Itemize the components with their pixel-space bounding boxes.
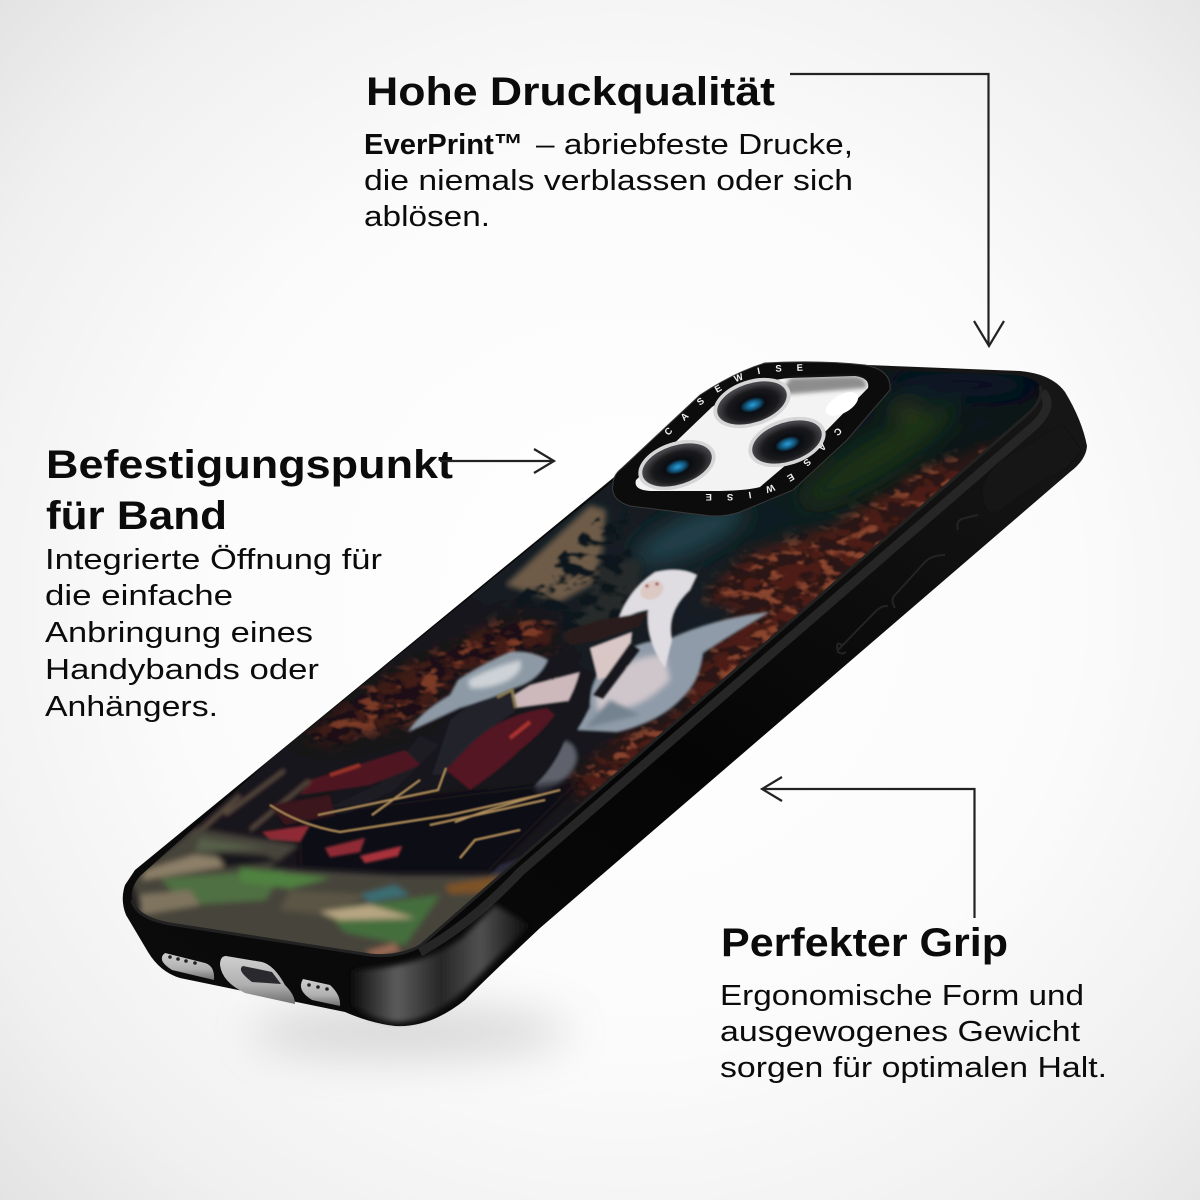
black gloves xyxy=(593,643,640,699)
bottom ports xyxy=(162,953,340,1006)
top right corner strap slot xyxy=(982,425,1080,512)
side rail highlight xyxy=(420,392,1047,952)
red eyes xyxy=(645,582,659,588)
body text xyxy=(45,544,382,723)
heading: Perfekter Grip xyxy=(721,921,1008,965)
body text: Ergonomische Form und xyxy=(720,980,1084,1012)
body text: die niemals verblassen oder sich xyxy=(364,165,853,197)
white hair and ears xyxy=(618,556,706,668)
arrow: to lanyard point xyxy=(440,449,554,473)
dark lower ground xyxy=(300,780,580,880)
brand ring text xyxy=(665,364,842,500)
corner sheen xyxy=(352,905,530,1022)
callout: Perfekter Grip xyxy=(720,921,1107,1084)
painted ground: tan and green xyxy=(130,828,505,960)
body text: – abriebfeste Drucke, xyxy=(536,129,853,161)
body text: ausgewogenes Gewicht xyxy=(720,1016,1080,1048)
lens: right xyxy=(742,408,832,476)
dark gown xyxy=(487,670,590,805)
face xyxy=(640,580,664,600)
speaker left xyxy=(162,953,214,980)
phone case xyxy=(122,361,1087,1026)
arrow: to grip side xyxy=(762,777,974,918)
arrow: to print surface xyxy=(790,74,1004,346)
body text: ablösen. xyxy=(364,201,490,233)
case body xyxy=(123,363,1087,1026)
phone drop shadow xyxy=(250,1006,570,1058)
lens: top xyxy=(707,369,797,437)
callout: Hohe Druckqualität xyxy=(364,70,853,233)
camera bump xyxy=(612,361,891,516)
body text: die einfache xyxy=(45,580,233,612)
brand ring text: CASEWISE xyxy=(706,428,842,500)
heading: für Band xyxy=(46,494,227,538)
stocking legs xyxy=(432,695,515,775)
left drape xyxy=(300,750,420,795)
gold ornaments xyxy=(270,768,560,858)
fox head and fur xyxy=(408,652,548,732)
speaker right xyxy=(301,979,340,1006)
screen rim xyxy=(132,386,1041,956)
printed artwork xyxy=(132,371,1040,954)
white fox tails xyxy=(534,612,770,795)
body text: Anbringung eines xyxy=(45,617,313,649)
figure xyxy=(300,556,706,815)
side buttons xyxy=(837,515,978,654)
red dress xyxy=(446,708,555,790)
white camera window xyxy=(636,376,868,491)
body text xyxy=(720,980,1107,1084)
red lower drapery xyxy=(261,794,519,878)
red flower bushes xyxy=(304,435,1000,808)
body text: sorgen für optimalen Halt. xyxy=(720,1052,1107,1084)
body text xyxy=(364,129,853,233)
heading: Befestigungspunkt xyxy=(46,443,453,487)
torso xyxy=(590,632,632,680)
brown streaks at left xyxy=(190,770,310,840)
brand ring text: CASEWISE xyxy=(665,364,803,435)
window inner shading xyxy=(780,376,866,395)
body text: Integrierte Öffnung für xyxy=(45,544,382,576)
heading xyxy=(46,443,453,538)
sleeve arm xyxy=(565,612,648,645)
body text: Handybands oder xyxy=(45,654,319,686)
heading: Hohe Druckqualität xyxy=(366,70,775,114)
green sky haze xyxy=(628,373,1030,577)
gold thigh band xyxy=(497,690,516,708)
tree with moonlit clouds xyxy=(504,501,646,636)
bare arm and thigh xyxy=(500,672,580,708)
flash xyxy=(822,387,862,421)
bump frame xyxy=(613,362,890,516)
callout: Befestigungspunkt für Band xyxy=(45,443,453,723)
lens: bottom left xyxy=(632,431,722,499)
charging port xyxy=(220,956,295,1004)
body text: Anhängers. xyxy=(45,691,218,723)
body text: EverPrint™ xyxy=(364,129,523,161)
